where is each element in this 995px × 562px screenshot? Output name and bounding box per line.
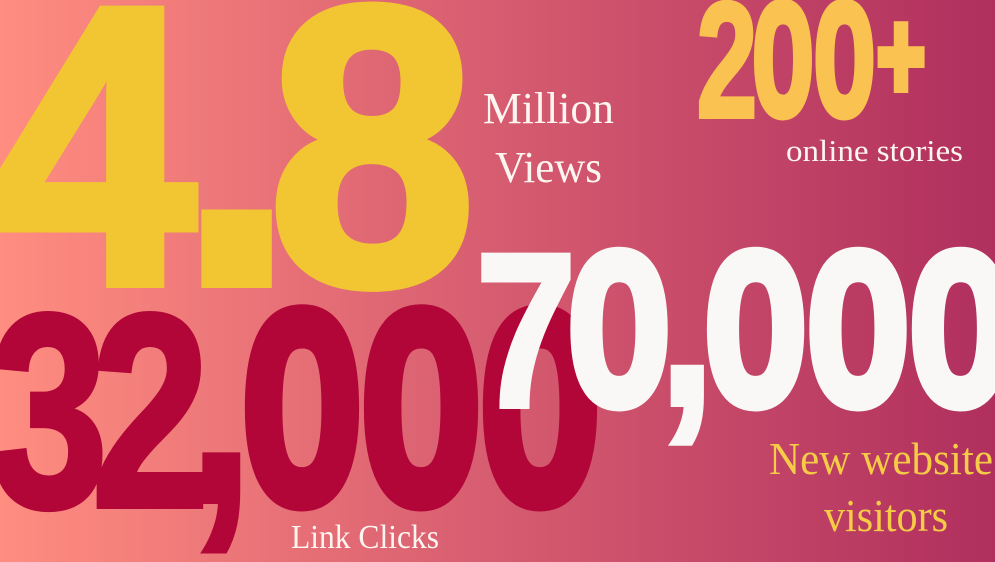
label: New website visitors bbox=[769, 433, 993, 541]
label: Million Views bbox=[483, 84, 614, 192]
number: 70,000: , bbox=[658, 179, 716, 458]
label: New website visitors: visitors bbox=[824, 490, 948, 541]
number: 32,000: 2 bbox=[92, 258, 209, 562]
number: 70,000: 0 bbox=[572, 217, 666, 443]
stat: 4.8 million views bbox=[0, 0, 614, 381]
number: 70,000: 7 bbox=[476, 207, 576, 453]
label: Million Views: Views bbox=[495, 143, 602, 192]
label: Million Views: Million bbox=[483, 84, 614, 133]
stat: 70,000 new website visitors bbox=[476, 179, 995, 541]
number: 32,000: 000 bbox=[247, 265, 595, 551]
stat: 200+ online stories bbox=[696, 0, 963, 168]
label: Link Clicks: Link Clicks bbox=[291, 519, 439, 556]
stat: 32,000 link clicks bbox=[0, 212, 595, 562]
label: online stories: online stories bbox=[786, 133, 963, 168]
number: 32,000: , bbox=[187, 212, 255, 562]
